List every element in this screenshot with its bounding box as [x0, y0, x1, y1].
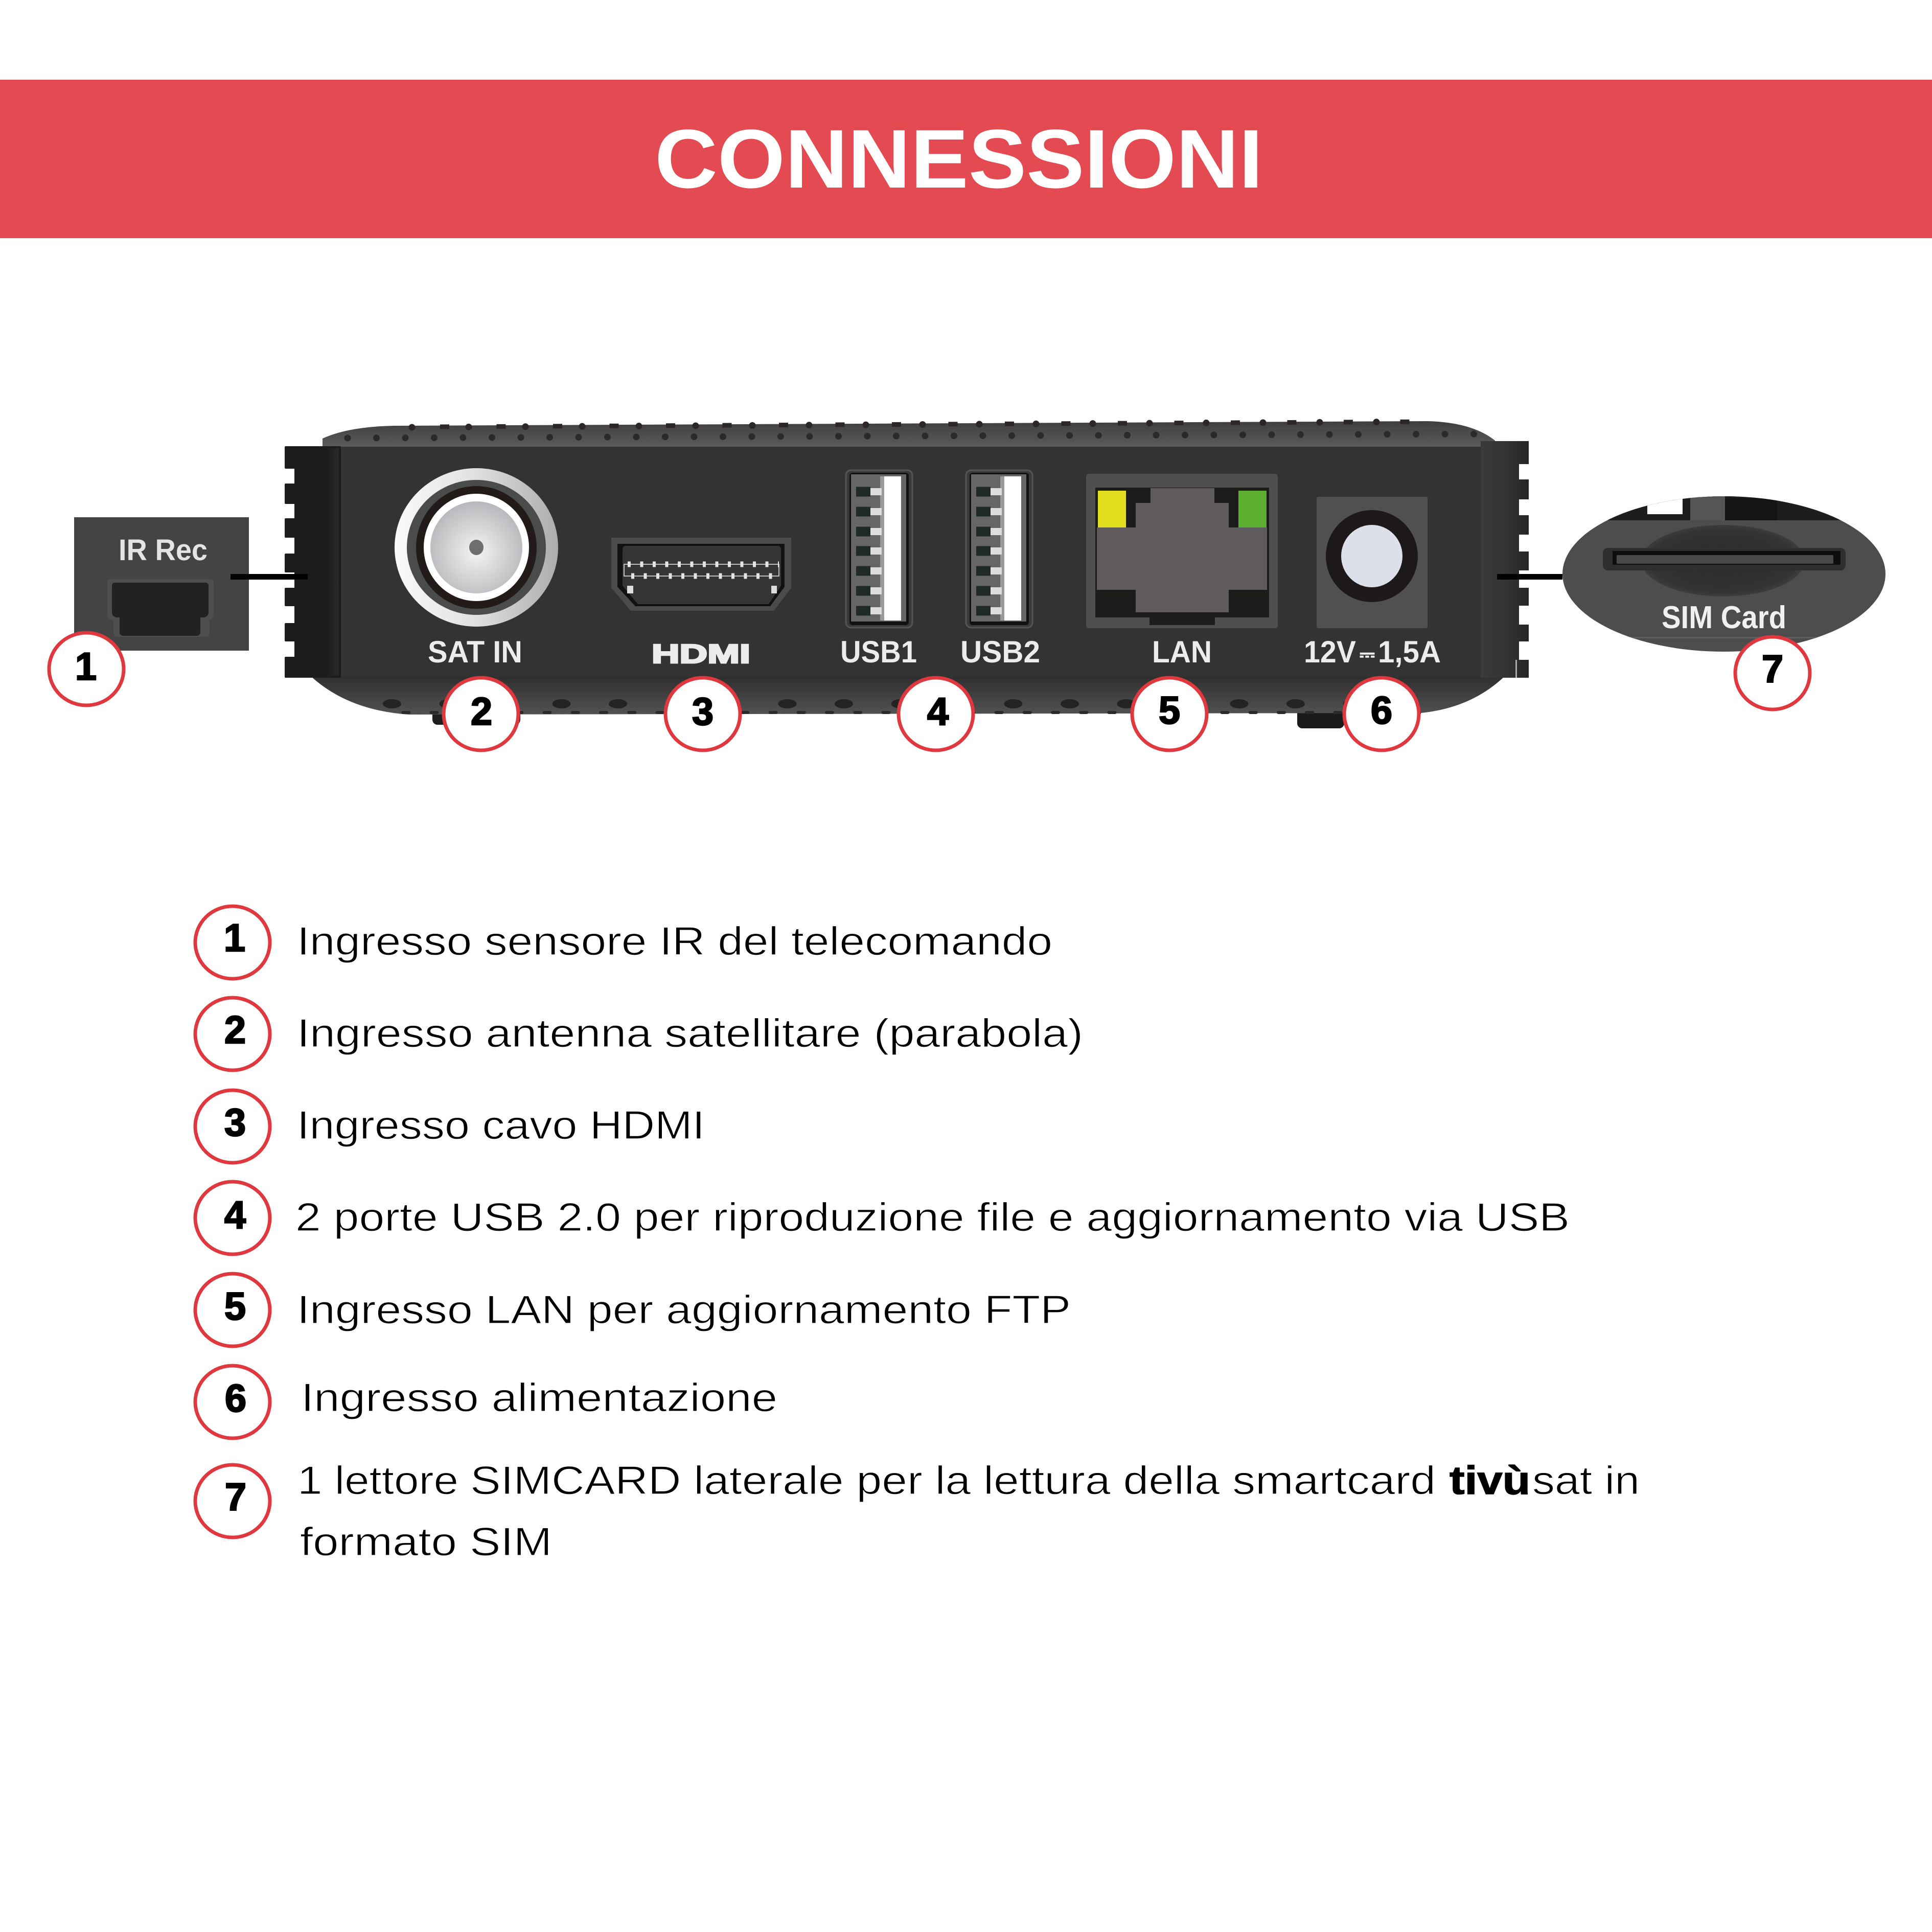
- legend item 7: 7: [225, 1476, 246, 1519]
- badge 5 on device: 5: [1159, 689, 1180, 732]
- legend item 5: Ingresso LAN per aggiornamento FTP: [297, 1287, 1071, 1332]
- legend item 6: Ingresso alimentazione: [301, 1375, 777, 1420]
- panel: IR receiver inset: [74, 517, 249, 651]
- label: power rating: [1304, 635, 1441, 669]
- label: power rating: ⎓: [1360, 640, 1375, 668]
- legend item 7: tivù: [1450, 1458, 1530, 1503]
- legend item 6: 6: [225, 1377, 246, 1420]
- label: LAN: LAN: [1152, 635, 1212, 669]
- device: rear view of receiver: [286, 421, 1529, 728]
- badge 6 on device: 6: [1371, 689, 1392, 732]
- label: SIM Card: SIM Card: [1662, 600, 1786, 635]
- legend list: [195, 906, 1640, 1564]
- legend item 7: sat in: [1532, 1458, 1640, 1503]
- legend item 4: 2 porte USB 2.0 per riproduzione file e aggiornamento via USB: [295, 1194, 1570, 1239]
- leader line: IR: [231, 574, 308, 580]
- connector: USB1 port: [846, 470, 912, 628]
- legend item 2: [195, 998, 1083, 1070]
- legend item 2: Ingresso antenna satellitare (parabola): [297, 1010, 1083, 1055]
- label: USB1: USB1: [840, 635, 917, 669]
- badge 7 on device: [1735, 637, 1810, 709]
- legend item 7: SIMCARD laterale per la lettura della smartcard: [470, 1458, 1436, 1503]
- legend item 5: 5: [224, 1285, 246, 1328]
- badge 3 on device: 3: [692, 690, 714, 733]
- label: HDMI logo: HDMI: [652, 639, 750, 669]
- panel: SIM card inset: [1559, 493, 1891, 657]
- connector: LAN port: [1086, 474, 1278, 628]
- badge 5 on device: [1132, 678, 1207, 750]
- leader line: SIM: [1497, 574, 1562, 580]
- left side ribs: [286, 447, 340, 677]
- badge 1 on device: [49, 633, 124, 705]
- legend item 3: 3: [224, 1101, 246, 1144]
- legend item 7: [195, 1458, 1640, 1564]
- legend item 1: 1: [224, 916, 245, 960]
- legend item 3: Ingresso cavo HDMI: [297, 1102, 705, 1147]
- badge 3 on device: [665, 678, 740, 750]
- right side ribs: [1481, 441, 1529, 678]
- connector: SAT IN coax: [395, 468, 558, 627]
- device front face: [332, 447, 1487, 677]
- icon: yellow LED: [1098, 491, 1126, 527]
- badge 7 on device: 7: [1762, 648, 1783, 691]
- label: power rating: 12V: [1304, 635, 1356, 669]
- badge 6 on device: [1344, 678, 1419, 750]
- badge 2 on device: 2: [471, 690, 492, 733]
- connector: HDMI port: [611, 538, 791, 611]
- device top edge with dots: [323, 421, 1495, 447]
- legend item 4: [195, 1182, 1570, 1254]
- icon: green LED: [1238, 491, 1267, 527]
- legend item 2: 2: [224, 1008, 246, 1052]
- badge 2 on device: [444, 678, 518, 750]
- connector: USB2 port: [966, 470, 1032, 628]
- legend item 1: [195, 906, 1052, 979]
- label: USB2: USB2: [960, 635, 1040, 669]
- device underside with vents: [310, 676, 1505, 728]
- icon: IR jack: [107, 579, 214, 637]
- legend item 7: formato SIM: [300, 1519, 552, 1564]
- legend item 6: [195, 1366, 777, 1438]
- label: power rating: 1,5A: [1378, 635, 1441, 669]
- title: CONNESSIONI: [655, 112, 1263, 205]
- label: SAT IN: SAT IN: [428, 635, 522, 669]
- legend item 4: 4: [224, 1193, 246, 1237]
- legend item 5: [195, 1274, 1071, 1346]
- label: IR Rec: IR Rec: [119, 534, 208, 567]
- badge 1 on device: 1: [75, 645, 97, 688]
- legend item 3: [195, 1090, 705, 1163]
- legend item 1: Ingresso sensore IR del telecomando: [297, 918, 1052, 963]
- badge 4 on device: [899, 678, 973, 750]
- connector: power jack: [1317, 497, 1428, 628]
- badge 4 on device: 4: [927, 690, 949, 733]
- title banner: [0, 80, 1932, 238]
- legend item 7: 1 lettore: [297, 1458, 458, 1503]
